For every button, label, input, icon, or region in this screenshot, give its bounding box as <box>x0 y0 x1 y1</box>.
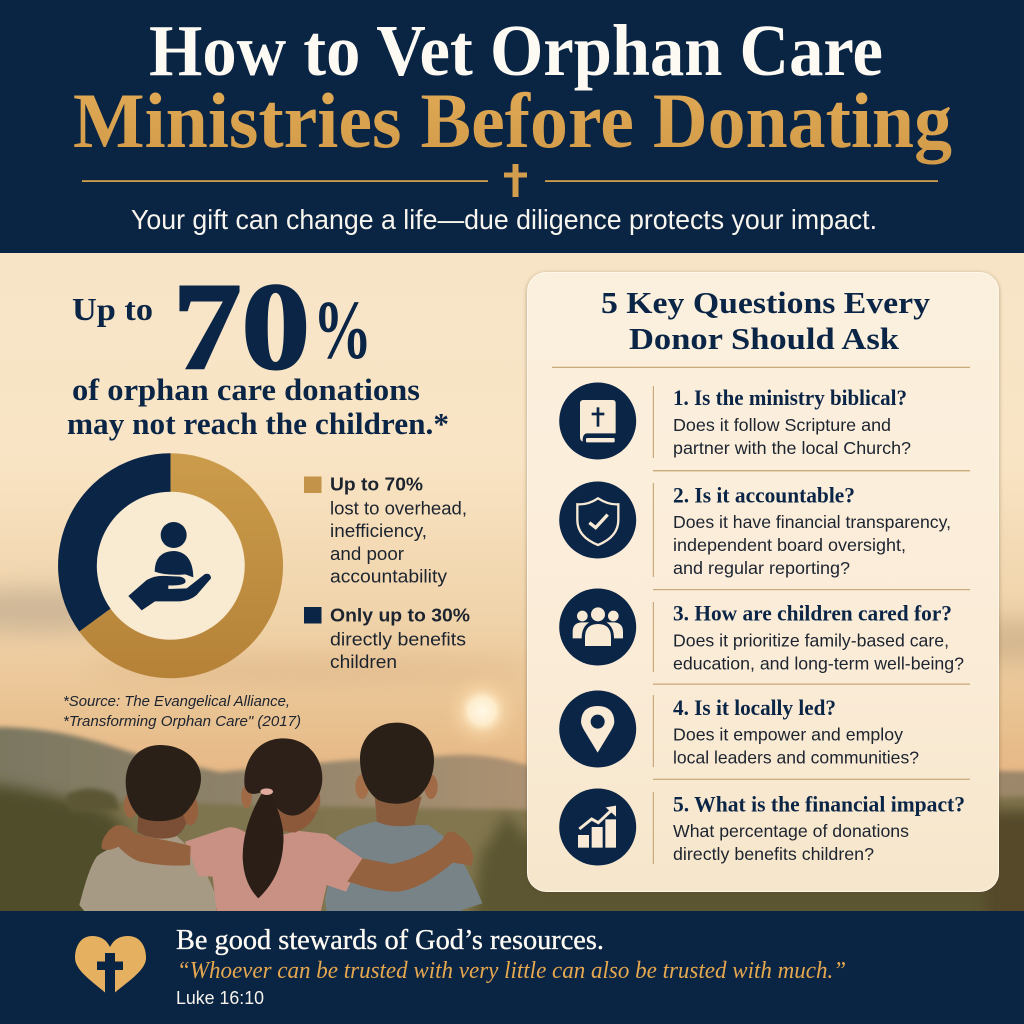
panel: key questions card <box>528 272 998 892</box>
legend item: 70 percent: Up to 70% <box>330 474 423 494</box>
title line 2: Ministries Before Donating <box>73 77 952 164</box>
question 5 <box>559 788 965 866</box>
icon: shield with check <box>559 482 636 558</box>
divider with cross <box>82 164 938 197</box>
title line 1: How to Vet Orphan Care <box>149 10 883 91</box>
legend <box>304 474 470 672</box>
question 4: Does it empower and employ <box>673 725 903 745</box>
illustration: three children from behind <box>79 723 482 912</box>
source note: *Source: The Evangelical Alliance, <box>63 693 290 710</box>
question 2: Does it have financial transparency, <box>673 512 951 532</box>
legend item: 70 percent: lost to overhead, <box>330 499 467 519</box>
question 1: partner with the local Church? <box>673 438 911 458</box>
icon: bible <box>559 382 636 460</box>
statistic headline <box>67 258 449 441</box>
icon: growth chart <box>559 788 636 866</box>
statistic headline: % <box>313 284 372 377</box>
question 5: 5. What is the financial impact? <box>673 792 965 817</box>
question 5: What percentage of donations <box>673 821 909 841</box>
source note <box>63 693 301 730</box>
card heading: 5 Key Questions Every <box>601 285 931 320</box>
statistic headline: Up to <box>72 291 153 327</box>
girl's arms <box>101 825 473 892</box>
legend item: 30 percent: children <box>330 652 397 672</box>
legend item: 30 percent: directly benefits <box>330 630 466 650</box>
legend item: 70 percent: accountability <box>330 567 447 587</box>
header band <box>0 0 1024 253</box>
legend item: 70 percent: inefficiency, <box>330 521 427 541</box>
subtitle: Your gift can change a life—due diligence protects your impact. <box>131 204 877 235</box>
question 3: education, and long-term well-being? <box>673 654 964 674</box>
background: sunset landscape <box>0 253 1024 940</box>
question 3 <box>559 588 964 674</box>
question 2: independent board oversight, <box>673 535 906 555</box>
question 4 <box>559 690 919 768</box>
question 3: 3. How are children cared for? <box>673 601 952 626</box>
icon: child in open hand <box>128 522 211 610</box>
icon: heart with cross <box>75 936 146 997</box>
question 2 <box>559 482 951 578</box>
footer message: Be good stewards of God’s resources. <box>176 925 604 956</box>
scripture reference: Luke 16:10 <box>176 988 264 1008</box>
statistic headline: may not reach the children.* <box>67 406 449 441</box>
card heading <box>601 285 931 356</box>
ponytail <box>243 793 284 898</box>
statistic headline: 70 <box>173 258 310 395</box>
statistic headline: of orphan care donations <box>72 372 420 407</box>
question 4: local leaders and communities? <box>673 748 919 768</box>
legend item: 30 percent <box>304 605 470 672</box>
question 1: Does it follow Scripture and <box>673 415 891 435</box>
question 1: 1. Is the ministry biblical? <box>673 385 907 410</box>
icon: location pin <box>559 690 636 768</box>
icon: group of people <box>559 588 636 666</box>
footer band <box>0 911 1024 1024</box>
legend item: 30 percent: Only up to 30% <box>330 605 470 626</box>
question 5: directly benefits children? <box>673 844 874 864</box>
source note: *Transforming Orphan Care" (2017) <box>63 713 301 730</box>
question 4: 4. Is it locally led? <box>673 695 836 720</box>
question 1 <box>559 382 911 460</box>
left boy <box>79 745 216 912</box>
donut chart <box>58 453 283 678</box>
scripture quote: “Whoever can be trusted with very little can also be trusted with much.” <box>177 958 846 984</box>
card heading: Donor Should Ask <box>629 321 900 356</box>
legend item: 70 percent: and poor <box>330 544 404 564</box>
girl <box>101 738 473 912</box>
question 2: 2. Is it accountable? <box>673 483 855 508</box>
legend item: 70 percent <box>304 474 467 587</box>
question 2: and regular reporting? <box>673 558 850 578</box>
right boy <box>325 723 482 912</box>
question 3: Does it prioritize family-based care, <box>673 631 949 651</box>
